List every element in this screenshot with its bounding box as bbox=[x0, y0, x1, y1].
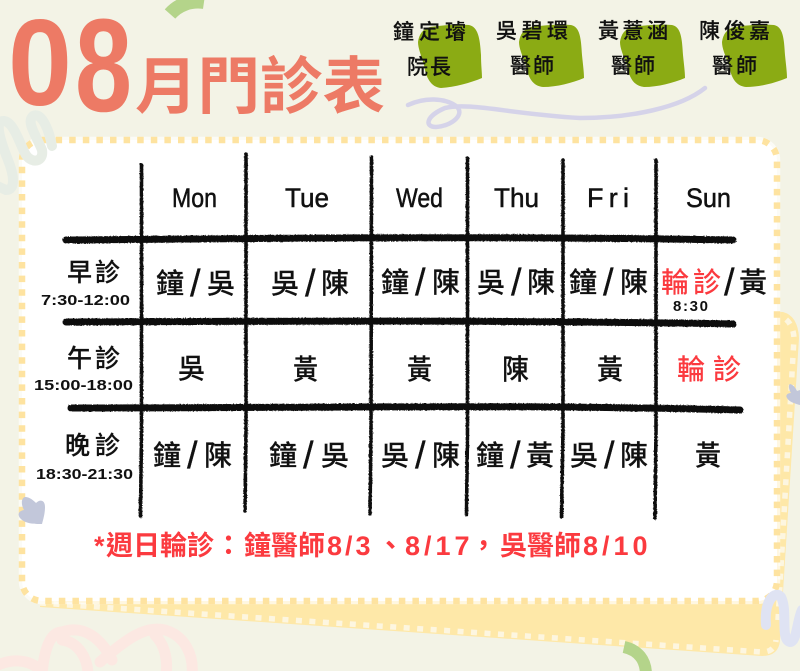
evening row cells: 鐘 bbox=[269, 440, 297, 471]
doctor: 黃薏涵 醫師: 黃薏涵 bbox=[598, 20, 668, 43]
morning row cells: 黃 bbox=[739, 267, 767, 298]
morning row cells: / bbox=[724, 262, 735, 304]
title: 月門診表 bbox=[135, 53, 385, 122]
morning row cells: / bbox=[305, 263, 316, 305]
evening row cells: 陳 bbox=[432, 440, 460, 471]
morning row cells: 陳 bbox=[527, 267, 555, 298]
evening row cells: 陳 bbox=[620, 440, 648, 471]
afternoon row cells: 黃 bbox=[407, 354, 432, 385]
footnote: Sunday rotation: 8/3 bbox=[327, 531, 374, 561]
morning row cells: 吳 bbox=[271, 268, 299, 299]
decoration: lilac swoosh bbox=[408, 88, 705, 127]
evening row cells: 吳 bbox=[570, 440, 598, 471]
doctor: 鐘定璿 院長 bbox=[393, 21, 482, 88]
evening row cells bbox=[153, 435, 721, 477]
label: evening session: 18:30-21:30 bbox=[36, 466, 133, 483]
label: afternoon session: 15:00-18:00 bbox=[34, 377, 133, 394]
morning row cells: 陳 bbox=[620, 267, 648, 298]
morning row cells: 陳 bbox=[321, 268, 349, 299]
label: morning session: 早診 bbox=[67, 259, 120, 287]
footnote: Sunday rotation: 、 bbox=[377, 531, 404, 561]
icon: blue heart right bbox=[786, 384, 800, 405]
morning row cells: 鐘 bbox=[381, 267, 409, 298]
morning row cells: 鐘 bbox=[156, 268, 184, 299]
doctor: 陳俊嘉 醫師: 醫師 bbox=[712, 55, 757, 78]
footnote: Sunday rotation: 8/17 bbox=[405, 531, 474, 561]
evening row cells: / bbox=[303, 435, 314, 477]
doctor: 黃薏涵 醫師: 醫師 bbox=[611, 55, 655, 78]
decoration: yellow back panel bbox=[40, 310, 799, 656]
morning row cells: / bbox=[603, 262, 614, 304]
morning row cells: / bbox=[190, 263, 201, 305]
afternoon row cells: 吳 bbox=[178, 353, 205, 384]
footnote: Sunday rotation: ： bbox=[215, 531, 242, 561]
footnote: Sunday rotation: 8/10 bbox=[583, 531, 652, 561]
evening row cells: / bbox=[415, 435, 426, 477]
label: evening session bbox=[36, 432, 133, 483]
morning row cells: 吳 bbox=[207, 268, 235, 299]
decoration: green arc top bbox=[170, 2, 204, 14]
evening row cells: 鐘 bbox=[476, 440, 504, 471]
evening row cells: / bbox=[187, 435, 198, 477]
evening row cells: 黃 bbox=[526, 440, 554, 471]
doctor: 鐘定璿 院長: 鐘定璿 bbox=[393, 21, 466, 44]
table header row: Wed bbox=[396, 183, 443, 213]
morning row cells: / bbox=[511, 262, 522, 304]
icon: blue heart left bbox=[19, 497, 45, 524]
morning row cells: 陳 bbox=[432, 267, 460, 298]
evening row cells: 鐘 bbox=[153, 440, 181, 471]
table header row: Mon bbox=[172, 183, 217, 213]
morning row cells: 鐘 bbox=[569, 267, 597, 298]
afternoon row cells: 輪診 bbox=[677, 354, 741, 385]
doctor: 陳俊嘉 醫師 bbox=[699, 20, 787, 87]
afternoon row cells bbox=[178, 353, 741, 385]
table header row: Thu bbox=[494, 183, 539, 213]
morning row cells: 輪診 bbox=[661, 267, 721, 298]
table grid lines bbox=[66, 154, 740, 518]
footnote: Sunday rotation: 鐘醫師 bbox=[244, 531, 325, 561]
footnote: Sunday rotation: * bbox=[94, 531, 105, 561]
footnote: Sunday rotation: 週日輪診 bbox=[106, 531, 214, 561]
doctor: 吳碧環 醫師 bbox=[496, 20, 584, 87]
decoration: green arc bottom bbox=[624, 647, 646, 671]
evening row cells: 黃 bbox=[695, 440, 721, 471]
label: evening session: 晚診 bbox=[65, 432, 120, 460]
row labels bbox=[34, 259, 133, 483]
table header row: Fri bbox=[587, 183, 629, 213]
table header row: Sun bbox=[686, 183, 731, 213]
evening row cells: 吳 bbox=[381, 440, 409, 471]
label: morning session bbox=[41, 259, 130, 309]
panel: white timetable card bbox=[22, 140, 777, 601]
footnote: Sunday rotation: 吳醫師 bbox=[500, 531, 581, 561]
label: afternoon session bbox=[34, 345, 133, 394]
decoration: pink heart scribble bbox=[0, 629, 192, 671]
afternoon row cells: 黃 bbox=[597, 354, 623, 385]
evening row cells: / bbox=[604, 435, 615, 477]
doctor: 吳碧環 醫師: 醫師 bbox=[510, 55, 554, 78]
evening row cells: / bbox=[510, 435, 521, 477]
footnote: Sunday rotation: ， bbox=[470, 531, 497, 561]
title bbox=[8, 0, 385, 140]
doctor: 黃薏涵 醫師 bbox=[598, 20, 685, 87]
doctor: 陳俊嘉 醫師: 陳俊嘉 bbox=[699, 20, 770, 43]
morning row cells: 吳 bbox=[477, 267, 505, 298]
doctor: 吳碧環 醫師: 吳碧環 bbox=[496, 20, 568, 43]
doctor legend bbox=[393, 20, 787, 88]
label: morning session: 7:30-12:00 bbox=[41, 292, 130, 309]
afternoon row cells: 黃 bbox=[293, 354, 318, 385]
morning row cells bbox=[156, 262, 767, 315]
afternoon row cells: 陳 bbox=[502, 354, 529, 385]
label: afternoon session: 午診 bbox=[67, 345, 120, 373]
table header row: Tue bbox=[285, 183, 329, 213]
decoration: periwinkle squiggle bottom right bbox=[766, 595, 800, 642]
decoration: pale squiggle top left bbox=[0, 115, 52, 190]
morning row cells: 8:30 bbox=[673, 298, 708, 315]
evening row cells: 吳 bbox=[321, 440, 349, 471]
morning row cells: / bbox=[415, 262, 426, 304]
evening row cells: 陳 bbox=[204, 440, 232, 471]
table header row bbox=[172, 183, 731, 213]
doctor: 鐘定璿 院長: 院長 bbox=[407, 56, 451, 79]
